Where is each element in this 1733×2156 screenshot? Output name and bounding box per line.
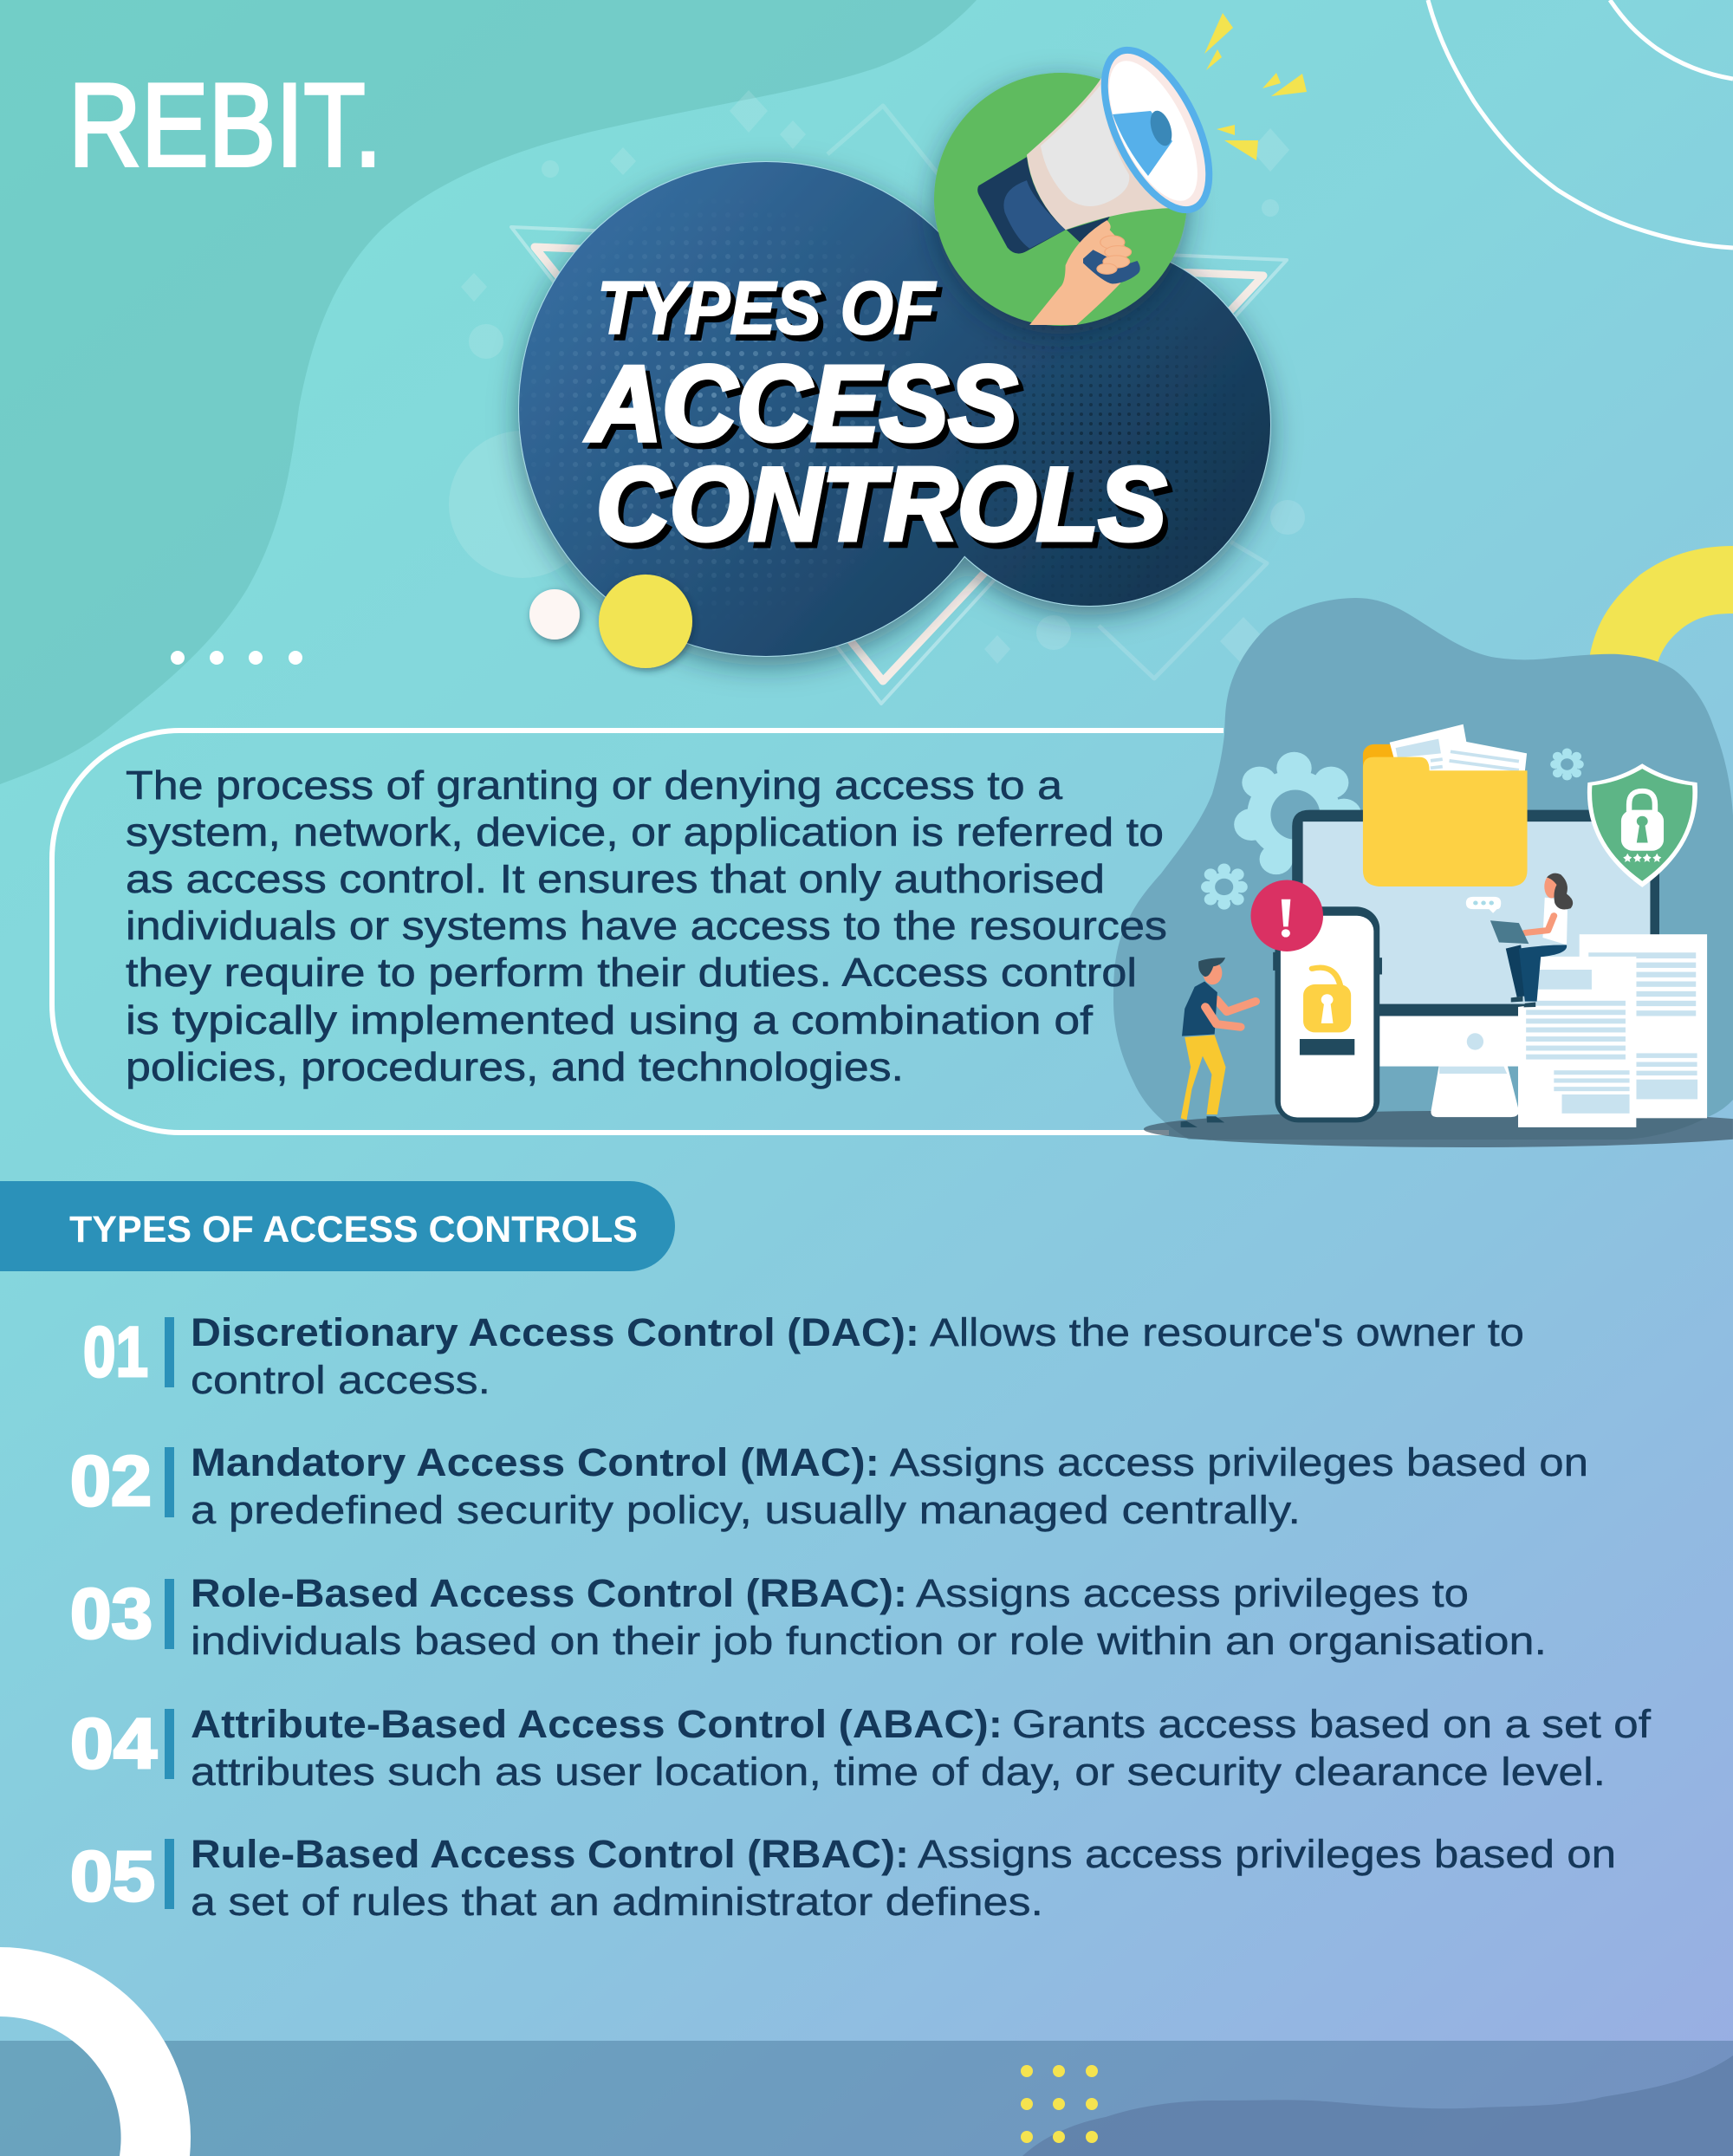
list item 04: Attribute-Based Access Control (ABAC): xyxy=(191,1702,1003,1746)
list item 04: attributes such as user location, time of day, or security clearance level. xyxy=(191,1750,1606,1794)
text block: description: individuals or systems have access to the resources xyxy=(126,903,1167,948)
megaphone body and hand xyxy=(977,75,1183,325)
sound sparks xyxy=(1204,13,1307,160)
footer blob xyxy=(1022,2055,1733,2156)
text block: description: system, network, device, or application is referred to xyxy=(126,809,1164,854)
list item 01: Discretionary Access Control (DAC): xyxy=(191,1310,919,1354)
list item 05: Assigns access privileges based on xyxy=(918,1832,1616,1876)
yellow dot accent xyxy=(599,575,692,668)
text block: description: is typically implemented using a combination of xyxy=(126,997,1093,1042)
faint background shapes xyxy=(449,90,1305,679)
figure: man xyxy=(1181,958,1256,1127)
list item 05: 05 xyxy=(70,1837,155,1916)
white ring bottom left xyxy=(0,1947,191,2156)
list item 03: Role-Based Access Control (RBAC): xyxy=(191,1571,907,1615)
list item 03: 03 xyxy=(70,1575,153,1653)
halftone dots xyxy=(546,240,1225,578)
title text: CONTROLS xyxy=(596,446,1166,562)
list item 03 xyxy=(70,1571,1547,1663)
list item 02: Assigns access privileges based on xyxy=(890,1440,1588,1484)
section heading text: TYPES OF ACCESS CONTROLS xyxy=(69,1209,638,1250)
panel: description callout outline xyxy=(52,731,1223,1133)
list item 01: Allows the resource's owner to xyxy=(930,1310,1524,1354)
decorative triangles behind title xyxy=(511,227,1287,704)
text block: description: policies, procedures, and technologies. xyxy=(126,1044,904,1089)
illustration blob xyxy=(1113,598,1733,1140)
white dot accent xyxy=(529,589,580,640)
green circle xyxy=(934,73,1187,326)
list item 02: 02 xyxy=(70,1442,152,1521)
icon: security shield xyxy=(1587,763,1697,887)
text block: description: they require to perform their duties. Access control xyxy=(126,950,1137,995)
list item 01: 01 xyxy=(83,1313,148,1392)
decorative top right arcs xyxy=(1428,0,1733,248)
background blob: top left xyxy=(0,0,977,784)
list item 04: 04 xyxy=(70,1705,157,1783)
documents stack xyxy=(1518,934,1707,1127)
icon: small gear right xyxy=(1550,749,1584,781)
text block: description xyxy=(126,763,1167,1089)
phone with open lock xyxy=(1273,906,1382,1122)
list item 05: a set of rules that an administrator defines. xyxy=(191,1880,1043,1924)
icon: megaphone xyxy=(934,13,1307,326)
logo: REBIT. xyxy=(68,59,382,191)
icon: large gear xyxy=(1234,752,1361,874)
megaphone bell xyxy=(1083,35,1230,225)
yellow dot grid xyxy=(1021,2065,1098,2143)
list item 05: Rule-Based Access Control (RBAC): xyxy=(191,1832,909,1876)
ground shadow xyxy=(1144,1111,1733,1147)
list item 01 xyxy=(83,1310,1524,1402)
figure: woman with laptop xyxy=(1490,873,1573,1007)
list item 02: a predefined security policy, usually managed centrally. xyxy=(191,1488,1301,1532)
icon: small gear left xyxy=(1201,864,1248,910)
title badge xyxy=(518,161,1271,668)
list item 05 xyxy=(70,1832,1616,1924)
text block: description: The process of granting or denying access to a xyxy=(126,763,1062,808)
list item 02 xyxy=(70,1440,1588,1532)
text block: description: as access control. It ensures that only authorised xyxy=(126,856,1105,901)
list item 03: individuals based on their job function or role within an organisation. xyxy=(191,1619,1547,1663)
title text: ACCESS xyxy=(585,345,1017,464)
title text xyxy=(585,267,1166,562)
list item 03: Assigns access privileges to xyxy=(916,1571,1469,1615)
decorative yellow arc xyxy=(1589,546,1733,663)
illustration: device security scene xyxy=(1144,724,1733,1147)
list item 02: Mandatory Access Control (MAC): xyxy=(191,1440,879,1484)
icon: folder with papers xyxy=(1363,724,1528,886)
section heading ribbon xyxy=(0,1181,675,1271)
list item 04: Grants access based on a set of xyxy=(1012,1702,1652,1746)
white dots row xyxy=(171,651,302,665)
monitor xyxy=(1292,810,1659,1117)
list item 01: control access. xyxy=(191,1358,490,1402)
speech bubble xyxy=(1466,897,1501,913)
footer band xyxy=(0,2041,1733,2156)
icon: alert badge xyxy=(1250,880,1323,951)
badge: overlapping navy circles xyxy=(518,161,1271,657)
title text: TYPES OF xyxy=(597,267,937,350)
list item 04 xyxy=(70,1702,1652,1794)
